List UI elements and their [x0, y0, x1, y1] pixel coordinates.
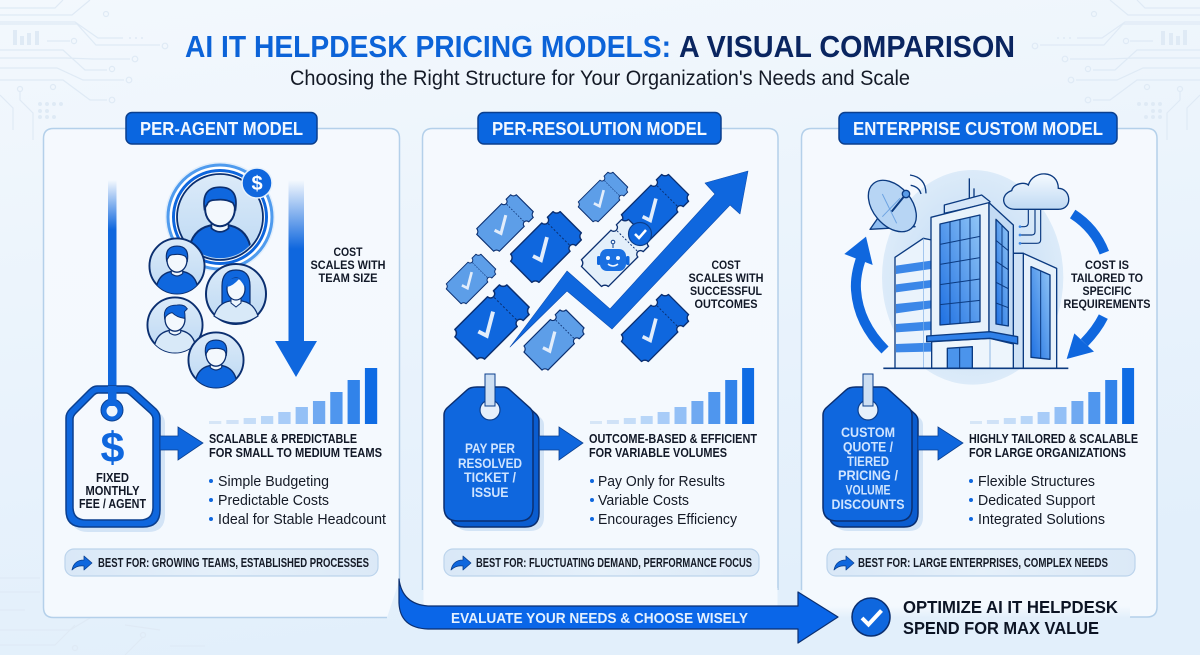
illustration: enterprise building: [844, 170, 1104, 385]
best for callout: [827, 549, 1135, 576]
price tag: DISCOUNTS: [832, 496, 904, 512]
panel fill below frame: [424, 588, 778, 616]
panel heading: [839, 112, 1117, 144]
circuit pattern right: [1032, 0, 1200, 140]
best for callout: BEST FOR: GROWING TEAMS, ESTABLISHED PROCESSES: [98, 555, 369, 570]
ticket light: [576, 170, 630, 224]
text: cost is tailored: [1064, 258, 1150, 311]
text: cost scales with successful outcomes: COST: [712, 258, 741, 272]
panel heading: PER-AGENT MODEL: [140, 118, 303, 139]
ground line: [883, 366, 1068, 371]
arrow: tag to summary: [539, 427, 583, 460]
price tag: RESOLVED: [458, 455, 522, 471]
icon: team member 1: [149, 238, 205, 296]
panel: enterprise custom model: [802, 112, 1157, 618]
price tag: PAY PER: [465, 440, 515, 456]
icon: primary agent with dollar badge: [165, 162, 275, 272]
summary heading: HIGHLY TAILORED & SCALABLE: [969, 431, 1138, 446]
price tag: QUOTE /: [843, 438, 893, 454]
hanging line to tag: [108, 180, 116, 405]
price tag: VOLUME: [846, 482, 890, 498]
circuit pattern bottom left: [0, 578, 205, 655]
summary heading: [209, 431, 382, 460]
summary heading: FOR LARGE ORGANIZATIONS: [969, 445, 1126, 460]
bullet list: [590, 474, 738, 528]
bullet list: Dedicated Support: [978, 493, 1095, 509]
price tag: ISSUE: [472, 484, 508, 500]
panel heading: PER-RESOLUTION MODEL: [492, 118, 707, 139]
bullet list: Ideal for Stable Headcount: [218, 512, 386, 528]
bullet list: Encourages Efficiency: [598, 512, 738, 528]
panel outline: [802, 128, 1157, 617]
bullet list: Flexible Structures: [978, 474, 1095, 490]
arrow: cycle bottom right: [1067, 317, 1103, 359]
arrow: tag to summary: [160, 427, 203, 460]
price tag: MONTHLY: [86, 483, 140, 498]
panel heading: [478, 112, 721, 144]
arrow: tag to summary: [918, 427, 963, 460]
ticket light: [521, 307, 587, 373]
ticket light: [444, 252, 498, 306]
text: cost scales with successful outcomes: SCALES WITH: [688, 271, 764, 285]
price tag: CUSTOM: [841, 424, 895, 440]
icon: check circle: [852, 598, 890, 636]
summary heading: [589, 431, 757, 460]
summary heading: FOR SMALL TO MEDIUM TEAMS: [209, 445, 382, 460]
bullet list: [209, 474, 386, 528]
bullet list: Integrated Solutions: [978, 512, 1105, 528]
bullet list: Predictable Costs: [218, 493, 329, 509]
price tag: FEE / AGENT: [79, 496, 146, 511]
best for callout: BEST FOR: LARGE ENTERPRISES, COMPLEX NEEDS: [858, 555, 1108, 570]
summary heading: SCALABLE & PREDICTABLE: [209, 431, 357, 446]
title: A VISUAL COMPARISON: [679, 29, 1015, 64]
panel frame: [422, 128, 778, 590]
subtitle: Choosing the Right Structure for Your Organization's Needs and Scale: [290, 67, 910, 90]
text: cost is tailored: REQUIREMENTS: [1064, 297, 1150, 311]
summary heading: OUTCOME-BASED & EFFICIENT: [589, 431, 757, 446]
ticket dark: [618, 291, 692, 365]
ticket dark: [451, 281, 533, 363]
panel heading: [126, 112, 317, 144]
circuit pattern left: [0, 0, 168, 140]
arrow: cycle top right: [1073, 214, 1104, 253]
right wing: [1013, 253, 1057, 368]
panel: per-agent model: [44, 112, 400, 618]
ticket dark: [618, 171, 692, 245]
arrow: rising outcomes: [510, 171, 748, 347]
ticket dark: [507, 208, 585, 286]
text: cost scales with team size: TEAM SIZE: [318, 271, 378, 285]
arrow: evaluate your needs: [399, 579, 838, 643]
bar chart: [970, 368, 1134, 424]
text: cost scales with successful outcomes: SUCCESSFUL: [690, 284, 762, 298]
bullet list: [969, 474, 1105, 528]
icon: primary agent with dollar badge: $: [251, 173, 263, 195]
bar chart: [590, 368, 754, 424]
arrow: cost scale: [275, 180, 317, 377]
best for callout: [444, 549, 759, 576]
arrow: cycle left: [844, 237, 885, 350]
icon: team member 3: [147, 297, 203, 355]
icon: robot: [597, 240, 630, 271]
ticket light: [474, 192, 536, 254]
price tag: $: [101, 424, 125, 472]
left wing: [895, 238, 932, 368]
price tag: PRICING /: [838, 467, 898, 483]
icon: satellite dish: [859, 171, 926, 241]
conclusion text: [903, 597, 1118, 638]
text: cost scales with team size: [310, 245, 386, 285]
conclusion text: SPEND FOR MAX VALUE: [903, 618, 1099, 638]
price tag: [823, 374, 923, 531]
panel fill below frame: [802, 588, 1130, 618]
title: AI IT HELPDESK PRICING MODELS:: [185, 29, 671, 64]
best for callout: BEST FOR: FLUCTUATING DEMAND, PERFORMANCE FOCUS: [476, 555, 752, 570]
bullet list: Simple Budgeting: [218, 474, 329, 490]
bar chart: [209, 368, 377, 424]
text: cost scales with successful outcomes: [688, 258, 764, 311]
ticket with robot: [578, 216, 652, 290]
central tower: [927, 178, 1018, 368]
price tag: TIERED: [847, 453, 889, 469]
icon: team member 2: [206, 264, 266, 324]
summary heading: [969, 431, 1138, 460]
conclusion text: OPTIMIZE AI IT HELPDESK: [903, 597, 1118, 617]
arrow: evaluate your needs: EVALUATE YOUR NEEDS & CHOOSE WISELY: [451, 610, 748, 627]
price tag: TICKET /: [464, 469, 516, 485]
icon: team member 4: [188, 332, 244, 390]
summary heading: FOR VARIABLE VOLUMES: [589, 445, 727, 460]
bullet list: Pay Only for Results: [598, 474, 725, 490]
icon: check badge: [628, 222, 652, 246]
panel frame: [44, 128, 400, 618]
text: cost is tailored: COST IS: [1085, 258, 1129, 272]
text: cost scales with successful outcomes: OUTCOMES: [694, 297, 758, 311]
price tag: [444, 374, 544, 531]
price tag: [66, 386, 165, 532]
text: cost scales with team size: COST: [334, 245, 363, 259]
panel: per-resolution model: [422, 112, 778, 616]
panel heading: ENTERPRISE CUSTOM MODEL: [853, 118, 1103, 139]
icon: cloud: [1004, 174, 1069, 245]
text: cost is tailored: TAILORED TO: [1071, 271, 1143, 285]
price tag: FIXED: [96, 470, 129, 485]
best for callout: [65, 549, 378, 576]
text: cost scales with team size: SCALES WITH: [310, 258, 386, 272]
text: cost is tailored: SPECIFIC: [1082, 284, 1132, 298]
bullet list: Variable Costs: [598, 493, 689, 509]
panel frame: [802, 128, 1157, 617]
